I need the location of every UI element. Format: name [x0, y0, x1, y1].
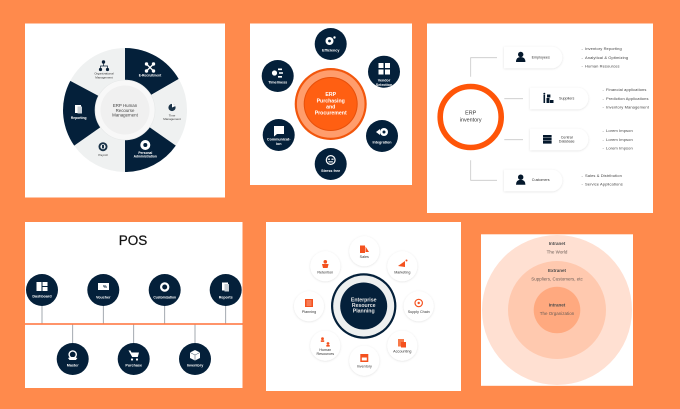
list: Suppliers: - [602, 87, 604, 92]
node: Vendor Selection [368, 56, 400, 88]
inner circle: Organization: The Organization [540, 311, 575, 316]
panel: ERP Purchasing and Procurement [250, 24, 412, 185]
outer circle: The World [482, 235, 632, 385]
segment: Organizational Management: Organizational [94, 72, 114, 76]
node: Accounting [387, 331, 417, 361]
segment: Personal Administration: Administration [134, 155, 157, 159]
node: Reports: Reports [219, 295, 233, 299]
node: Supply Chain: Supply Chain [408, 310, 430, 314]
card: Suppliers: Suppliers [559, 96, 575, 100]
segment: Reporting: Reporting [71, 116, 86, 120]
panel: POS [25, 222, 243, 388]
connectors [42, 306, 226, 343]
node: Inventory [349, 346, 379, 376]
outer circle: The World: Intranet [549, 241, 566, 246]
node: Inventory: Inventory [187, 364, 204, 368]
timeline [25, 323, 243, 325]
card: Central Database: Central [561, 135, 573, 139]
panel: Intranet Extranet circles [481, 234, 633, 386]
node: Master [57, 343, 89, 375]
outer circle: The World: The World [547, 250, 568, 254]
card: Customers [504, 170, 562, 191]
segment: E-Recruitment [125, 48, 179, 110]
center hub: Procurement [315, 110, 347, 116]
node: Voucher: Voucher [96, 295, 111, 299]
node: Timeliness [262, 60, 294, 92]
node: Stress free: Stress free [321, 169, 340, 173]
node: Dashboard: Dashboard [32, 295, 52, 299]
list: Suppliers: - [602, 96, 604, 101]
list: Suppliers: Inventory Management [606, 104, 650, 110]
list: Central Database: - [602, 128, 604, 133]
card: Suppliers [530, 88, 588, 109]
list: Suppliers: Prediction Applications [606, 96, 649, 101]
node: Supply Chain [404, 291, 434, 321]
card: Employees: Employees [532, 55, 550, 59]
panel: ERP inventory [427, 24, 653, 213]
center hub [295, 68, 367, 140]
node: Marketing: Marketing [394, 271, 410, 275]
node: Customization [149, 274, 181, 306]
card: Central Database [530, 129, 588, 150]
node: Efficiency [315, 28, 347, 60]
node: Human Resources: Resources [316, 352, 334, 356]
list: Customers: - [582, 182, 584, 186]
node: Marketing [387, 251, 417, 281]
list: Employees [582, 46, 628, 68]
segment: Payroll: Payroll [98, 153, 108, 157]
segment: Organizational Management: Management [95, 75, 113, 79]
middle circle: Extranet: Extranet [548, 268, 567, 273]
center hub: Purchasing [317, 98, 345, 104]
node: Retention: Retention [317, 270, 333, 274]
segment: Personal Administration [125, 110, 176, 172]
list: Central Database: Lorem Impson [606, 137, 633, 142]
ring: ERP inventory: inventory [460, 117, 482, 123]
list: Employees: Analytical & Optimizing [585, 55, 628, 60]
card: Employees [504, 47, 562, 68]
segment: Time Management: Management [163, 117, 181, 121]
center hub: Enterprise [351, 297, 377, 303]
list: Employees: - [582, 55, 584, 60]
node: Vendor Selection: Selection [376, 83, 393, 87]
list: Central Database: Lorem Impson [606, 146, 633, 150]
segment: Payroll [74, 110, 125, 172]
center hub: Resource [352, 303, 376, 309]
node: Planning: Planning [302, 310, 316, 314]
node: Integration: Integration [372, 141, 392, 145]
inner circle: Organization: Intranet [549, 302, 566, 308]
node: Master: Master [67, 364, 79, 368]
node: Human Resources: Human [319, 348, 331, 352]
list: Suppliers [602, 87, 650, 110]
node: Purchase [118, 343, 150, 375]
node: Communication: Communicat- [267, 138, 291, 142]
list: Customers: Sales & Distribution [585, 173, 622, 178]
node: Voucher [87, 274, 119, 306]
center hub: Recourse [116, 108, 135, 113]
list: Central Database: - [602, 146, 604, 150]
card: Central Database: Database [559, 140, 575, 144]
center hub: Planning [353, 309, 375, 315]
panel: Enterprise Resource Planning [266, 222, 461, 391]
list: Customers: - [582, 173, 584, 178]
node: Human Resources [310, 331, 340, 361]
list: Customers: Service Applications [585, 182, 623, 186]
list: Suppliers: - [602, 104, 604, 110]
node: Customization: Customization [153, 295, 176, 299]
node: Communication: ion [276, 142, 282, 146]
segment: E-Recruitment: E-Recruitment [139, 73, 162, 77]
node: Integration [366, 120, 398, 152]
node: Retention [310, 251, 340, 281]
list: Central Database: Lorem Impson [606, 128, 633, 133]
connector lines [471, 58, 523, 180]
center hub: Management [112, 112, 139, 118]
node: Vendor Selection: Vendor [378, 79, 391, 83]
node: Inventory: Inventory [357, 365, 372, 369]
list: Employees: Inventory Reporting [585, 46, 622, 51]
node: Stress free [315, 148, 347, 180]
segment: Time Management: Time [169, 114, 176, 118]
node: Sales [349, 236, 379, 266]
segment: Personal Administration: Personal [138, 151, 152, 155]
inner circle: Organization [534, 287, 580, 333]
node: Sales: Sales [360, 255, 369, 259]
node: Purchase: Purchase [125, 364, 142, 368]
middle circle: Extranet [508, 261, 606, 359]
list: Employees: Human Resources [585, 64, 620, 68]
list: Employees: - [582, 46, 584, 51]
node: Voucher: % [103, 284, 107, 289]
list: Central Database [602, 128, 633, 150]
ring: ERP inventory: ERP [465, 111, 477, 117]
node: Dashboard [26, 274, 58, 306]
node: Inventory [179, 343, 211, 375]
list: Suppliers: Financial applications [606, 87, 646, 92]
center hub [95, 80, 155, 140]
node: Communication [263, 119, 295, 151]
center hub: and [326, 104, 335, 110]
list: Central Database: - [602, 137, 604, 142]
panel: ERP Human Resource Management [25, 24, 225, 198]
card: Customers: Customers [532, 178, 550, 182]
node: Planning [294, 291, 324, 321]
node: Reports [210, 274, 242, 306]
center hub: ERP Human [113, 103, 138, 108]
segment: Time Management [125, 79, 187, 146]
center hub: ERP [325, 92, 337, 98]
center hub [331, 273, 396, 339]
title: POS [119, 233, 147, 248]
ring: ERP inventory [440, 86, 501, 148]
list: Customers [582, 173, 623, 186]
segment: Reporting [63, 81, 125, 146]
list: Employees: - [582, 64, 584, 68]
middle circle: Extranet: Suppliers, Customers, etc [531, 276, 584, 282]
node: Efficiency: Efficiency [322, 49, 340, 53]
segment: Organizational Management [70, 48, 125, 110]
node: Timeliness: Timeliness [268, 81, 287, 85]
node: Accounting: Accounting [393, 350, 411, 354]
